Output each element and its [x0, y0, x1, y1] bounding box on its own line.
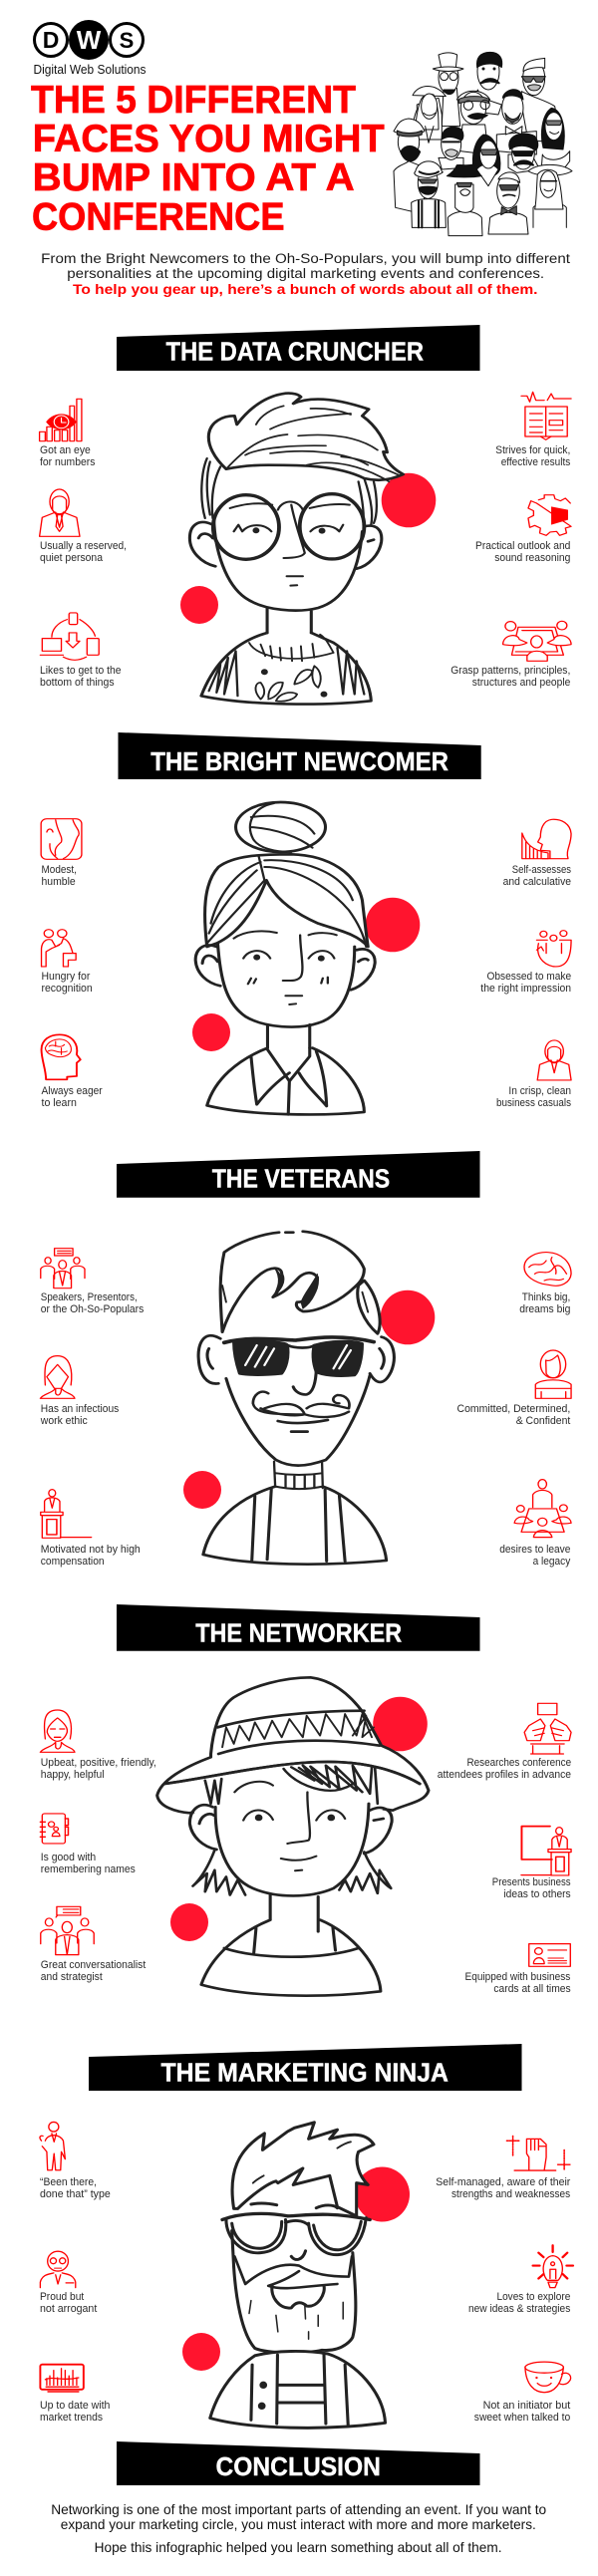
label: grasp patterns [450, 665, 570, 689]
icon: brain [524, 1253, 571, 1286]
heading banner: bright newcomer: THE BRIGHT NEWCOMER [150, 748, 448, 776]
label: right impression: the right impression [480, 983, 571, 995]
label: remembering names [41, 1852, 136, 1875]
label: remembering names: remembering names [41, 1863, 136, 1875]
label: business cards [464, 1971, 571, 1995]
icon: board presenter [521, 1827, 571, 1875]
label: proud [40, 2291, 97, 2315]
icon: reserved person [40, 489, 80, 536]
conclusion text: Hope this infographic helped you learn something about all of them. [95, 2539, 502, 2555]
label: motivated [41, 1544, 141, 1568]
icon: light bulb [533, 2245, 573, 2288]
label: legacy: desires to leave [499, 1544, 570, 1556]
label: been there [40, 2176, 111, 2200]
label: sweet when talked to: Not an initiator but [483, 2400, 570, 2412]
label: eager to learn [42, 1085, 103, 1109]
panel: conclusion [51, 2441, 546, 2555]
icon: business casual person [537, 1040, 571, 1080]
label: quick results: effective results [501, 456, 571, 468]
panel: the marketing ninja [40, 2044, 573, 2428]
conclusion text: expand your marketing circle, you must interact with more and more marketers. [61, 2516, 536, 2532]
label: right impression: Obsessed to make [486, 971, 571, 983]
label: conversationalist: Great conversationalist [41, 1959, 146, 1971]
heading banner: the veterans: THE VETERANS [212, 1166, 390, 1194]
label: bottom of things [40, 665, 122, 689]
label: speakers: or the Oh-So-Populars [41, 1303, 145, 1315]
label: quick results [495, 444, 571, 468]
label: remembering names: Is good with [41, 1852, 96, 1863]
panel: the data cruncher [40, 325, 571, 705]
label: explore ideas: new ideas & strategies [468, 2303, 571, 2315]
heading banner: bright newcomer [118, 732, 481, 779]
title [31, 79, 385, 239]
label: self-assesses: Self-assesses [512, 864, 571, 876]
label: speakers [41, 1291, 145, 1315]
label: market trends [40, 2400, 110, 2424]
label: hungry for recognition: recognition [42, 983, 93, 995]
heading banner: the data cruncher: THE DATA CRUNCHER [165, 339, 424, 367]
heading banner: marketing ninja [89, 2044, 522, 2091]
label: upbeat: happy, helpful [41, 1769, 105, 1781]
icon: upbeat woman [40, 1710, 75, 1752]
label: reserved persona [40, 540, 127, 564]
icon: podium speaker [41, 1490, 92, 1538]
label: motivated: Motivated not by high [41, 1544, 141, 1556]
label: committed: & Confident [516, 1415, 570, 1427]
label: eager to learn: Always eager [42, 1085, 103, 1097]
label: presents ideas: ideas to others [503, 1888, 571, 1900]
icon: people with arc arrow [536, 931, 571, 967]
red circle accents [192, 898, 420, 1051]
icon: modest face [41, 819, 82, 859]
label: infectious work ethic: Has an infectious [41, 1403, 120, 1415]
intro text: personalities at the upcoming digital marketing events and conferences. [67, 266, 544, 281]
label: reserved persona: quiet persona [40, 552, 104, 564]
icon: legacy boardroom [514, 1480, 571, 1538]
icon: standing man [40, 2122, 65, 2170]
label: practical outlook [475, 540, 570, 564]
label: market trends: Up to date with [40, 2400, 110, 2412]
label: got an eye: Got an eye [40, 444, 91, 456]
label: bottom of things: bottom of things [40, 677, 115, 689]
label: got an eye [40, 444, 96, 468]
label: motivated: compensation [41, 1556, 105, 1568]
character: veteran portrait [198, 1232, 394, 1565]
icon: smiling cup [525, 2362, 571, 2393]
label: grasp patterns: Grasp patterns, principles, [450, 665, 570, 677]
label: proud: not arrogant [40, 2303, 97, 2315]
label: committed [456, 1403, 570, 1427]
red circle accents [180, 473, 436, 624]
icon: market trend monitor [40, 2365, 84, 2392]
icon: brain in head [42, 1034, 81, 1079]
label: legacy: a legacy [533, 1556, 571, 1568]
label: eager to learn: to learn [42, 1097, 77, 1109]
icon: research table [524, 1703, 571, 1754]
icon: speakers group [41, 1249, 85, 1288]
heading banner: the networker: THE NETWORKER [195, 1620, 402, 1648]
icon: proud man with glasses [40, 2251, 76, 2288]
label: self-assesses: and calculative [503, 876, 571, 888]
title: BUMP INTO AT A [33, 156, 355, 199]
icon: meeting table [503, 621, 571, 661]
label: market trends: market trends [40, 2412, 103, 2424]
intro text: From the Bright Newcomers to the Oh-So-Populars, you will bump into different [41, 251, 570, 266]
conclusion text: Networking is one of the most important parts of attending an event. If you want to [51, 2501, 546, 2517]
label: reserved persona: Usually a reserved, [40, 540, 127, 552]
character: marketing ninja portrait [210, 2123, 386, 2428]
label: been there: done that” type [40, 2188, 111, 2200]
label: business cards: cards at all times [493, 1983, 571, 1995]
label: committed: Committed, Determined, [456, 1403, 570, 1415]
intro text: To help you gear up, here’s a bunch of words about all of them. [73, 282, 538, 297]
label: research attendees: Researches conference [466, 1757, 571, 1769]
label: modest humble: Modest, [42, 864, 77, 876]
icon: contact notebook [40, 1814, 68, 1844]
icon: fist with arrows [506, 2136, 571, 2170]
label: conversationalist [41, 1959, 146, 1983]
icon: book with pulse [521, 392, 571, 439]
icon: gear and megaphone [528, 495, 571, 535]
label: thinks big: dreams big [519, 1303, 570, 1315]
icon: business card [529, 1944, 570, 1966]
heading banner: conclusion: CONCLUSION [215, 2453, 381, 2481]
label: modest humble [42, 864, 77, 888]
label: upbeat [41, 1757, 156, 1781]
label: self-managed: strengths and weaknesses [451, 2188, 571, 2200]
icon: eye and bars [40, 399, 82, 441]
character: data cruncher portrait [189, 394, 404, 705]
label: research attendees [438, 1757, 571, 1781]
icon: committed woman [535, 1350, 571, 1398]
label: proud: Proud but [40, 2291, 84, 2303]
icon: handshake [42, 930, 76, 967]
red circle accents [183, 1290, 435, 1509]
label: right impression [480, 971, 571, 995]
label: business casuals: In crisp, clean [508, 1085, 571, 1097]
label: business casuals: business casuals [496, 1097, 571, 1109]
logo: DWS Digital Web Solutions: Digital Web Solutions [34, 62, 147, 77]
panel: the veterans [40, 1151, 571, 1568]
logo: DWS Digital Web Solutions: D [43, 27, 59, 53]
heading banner: the data cruncher [117, 325, 480, 371]
label: been there: “Been there, [40, 2176, 97, 2188]
label: practical outlook: Practical outlook and [475, 540, 570, 552]
red circle accents [182, 2166, 410, 2371]
label: speakers: Speakers, Presentors, [41, 1291, 138, 1303]
label: grasp patterns: structures and people [472, 677, 570, 689]
label: sweet when talked to [474, 2400, 570, 2424]
heading banner: the veterans [117, 1151, 480, 1198]
illustration: crowd of conference people [394, 52, 572, 236]
label: conversationalist: and strategist [41, 1971, 103, 1983]
label: self-managed: Self-managed, aware of their [436, 2176, 571, 2188]
character: bright newcomer portrait [195, 802, 375, 1114]
label: got an eye: for numbers [40, 456, 96, 468]
label: infectious work ethic: work ethic [40, 1415, 88, 1427]
label: hungry for recognition: Hungry for [42, 971, 91, 983]
label: explore ideas [468, 2291, 571, 2315]
label: legacy [499, 1544, 571, 1568]
label: hungry for recognition [42, 971, 93, 995]
character: networker portrait with hat [157, 1677, 429, 1996]
panel: the bright newcomer [41, 732, 571, 1114]
logo: DWS Digital Web Solutions: S [120, 28, 134, 53]
label: thinks big [519, 1291, 570, 1315]
label: presents ideas [492, 1876, 571, 1900]
logo: DWS Digital Web Solutions: W [77, 25, 102, 55]
label: sweet when talked to: sweet when talked to [474, 2412, 570, 2424]
title: CONFERENCE [32, 195, 285, 239]
label: infectious work ethic [40, 1403, 120, 1427]
label: self-managed [436, 2176, 571, 2200]
label: upbeat: Upbeat, positive, friendly, [41, 1757, 156, 1769]
red circle accents [170, 1697, 428, 1941]
label: business casuals [496, 1085, 571, 1109]
label: explore ideas: Loves to explore [496, 2291, 570, 2303]
label: business cards: Equipped with business [464, 1971, 571, 1983]
heading banner: conclusion [117, 2441, 480, 2485]
icon: devices cycle [40, 613, 99, 660]
conclusion text [51, 2501, 546, 2555]
label: presents ideas: Presents business [492, 1876, 571, 1888]
heading banner: marketing ninja: THE MARKETING NINJA [161, 2059, 448, 2087]
label: practical outlook: sound reasoning [494, 552, 570, 564]
heading banner: the networker [117, 1604, 480, 1651]
icon: self-assessing head with chart [522, 819, 571, 859]
icon: conversation group [41, 1906, 94, 1955]
title: THE 5 DIFFERENT [31, 79, 356, 122]
logo: DWS Digital Web Solutions [34, 20, 147, 77]
label: research attendees: attendees profiles in advance [438, 1769, 571, 1781]
label: quick results: Strives for quick, [495, 444, 570, 456]
panel: the networker [40, 1604, 571, 1996]
label: modest humble: humble [42, 876, 76, 888]
intro text [41, 251, 570, 297]
title: FACES YOU MIGHT [33, 118, 385, 160]
label: bottom of things: Likes to get to the [40, 665, 122, 677]
label: self-assesses [503, 864, 571, 888]
icon: woman long hair [40, 1356, 75, 1398]
label: thinks big: Thinks big, [522, 1291, 570, 1303]
